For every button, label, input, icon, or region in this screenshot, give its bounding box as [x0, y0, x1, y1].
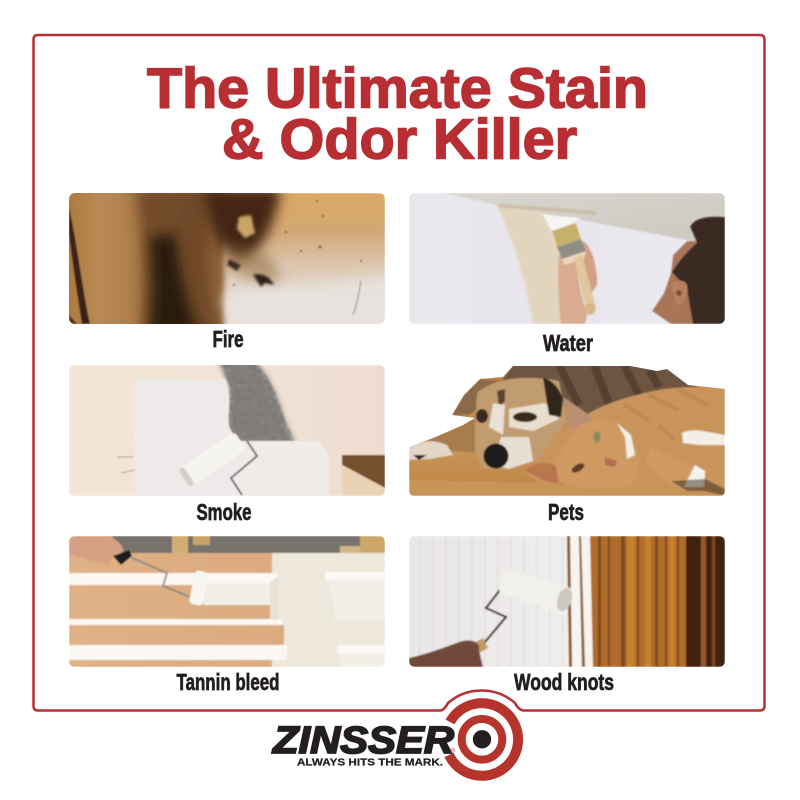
wordmark: ZINSSER [272, 720, 455, 762]
roller [178, 432, 246, 487]
counter [342, 455, 385, 488]
cat [525, 387, 725, 491]
label: Tannin bleed: Tannin bleed [176, 669, 280, 695]
dog front leg [425, 416, 476, 453]
hand [69, 536, 123, 564]
label: Smoke: Smoke [196, 499, 252, 525]
roller frame [485, 586, 506, 642]
photo: wood knots and beadboard [409, 536, 725, 667]
red frame [34, 35, 764, 710]
brush [552, 223, 596, 315]
icon: target rings [449, 703, 518, 776]
photo: door with tannin bleed [69, 536, 385, 667]
label: Wood knots: Wood knots [514, 669, 614, 695]
dog head [475, 378, 567, 469]
registered mark: ® [450, 747, 456, 755]
paint stroke [543, 215, 581, 231]
dog ear [452, 379, 501, 415]
tagline: ALWAYS HITS THE MARK. [297, 758, 443, 768]
photo: water stain being painted [409, 193, 725, 324]
right door panels [329, 580, 384, 620]
logo: Zinsser [272, 703, 518, 776]
white rails [69, 573, 278, 585]
photo: dog and cat on floor [409, 365, 725, 496]
dog body [502, 366, 696, 414]
title [147, 56, 648, 172]
handle [113, 550, 132, 565]
roller frame [231, 441, 257, 495]
painted panel [205, 583, 270, 605]
label: Pets: Pets [548, 499, 584, 525]
man [652, 241, 699, 324]
workshop background [110, 536, 361, 554]
label: Water: Water [543, 330, 593, 356]
photo: fire damaged wall [69, 193, 385, 324]
wood areas [69, 553, 272, 573]
wood [589, 536, 688, 667]
roller [498, 569, 572, 613]
label: Fire: Fire [212, 326, 244, 352]
wall scratches [117, 457, 135, 473]
photo: smoke stain covered by primer [69, 361, 385, 496]
hand [409, 640, 483, 667]
title: & Odor Killer [222, 108, 577, 172]
hand and arm [558, 254, 587, 324]
roller [189, 570, 209, 606]
title: The Ultimate Stain [147, 56, 648, 120]
roller frame [132, 558, 195, 599]
primer sheets [133, 379, 247, 496]
handle [475, 638, 488, 654]
